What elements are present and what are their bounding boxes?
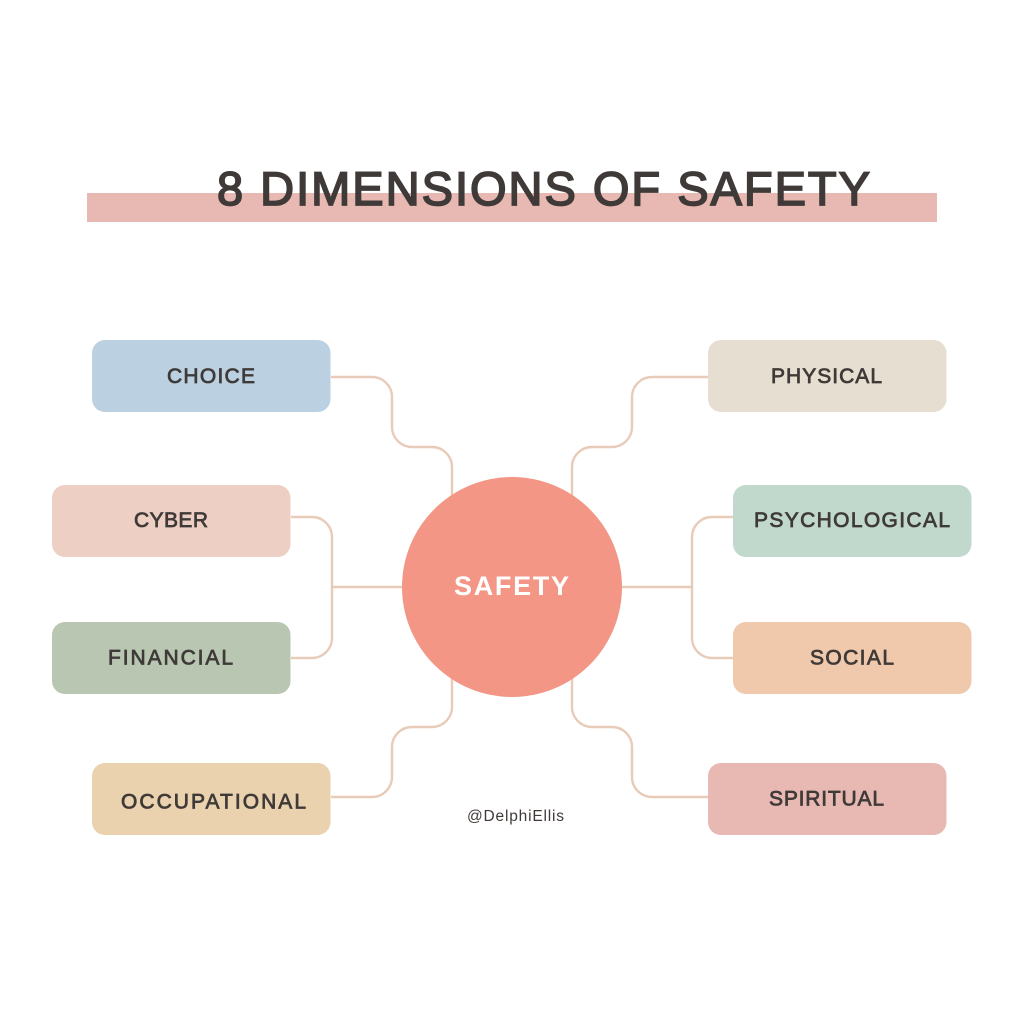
box: spiritual xyxy=(708,763,946,835)
box: choice xyxy=(92,340,330,412)
box: choice: CHOICE xyxy=(167,365,255,388)
box: occupational: OCCUPATIONAL xyxy=(121,790,306,814)
box: spiritual: SPIRITUAL xyxy=(769,788,884,810)
box: physical: PHYSICAL xyxy=(771,365,882,388)
box: psychological xyxy=(733,485,972,557)
box: financial xyxy=(52,622,290,694)
box: cyber: CYBER xyxy=(134,509,208,532)
box: social xyxy=(733,622,972,694)
central circle: safety xyxy=(402,477,622,697)
box: financial: FINANCIAL xyxy=(108,646,233,670)
title: 8 DIMENSIONS OF SAFETY xyxy=(217,162,870,215)
box: occupational xyxy=(92,763,330,835)
central circle: safety: SAFETY xyxy=(454,571,569,601)
box: physical xyxy=(708,340,946,412)
box: psychological: PSYCHOLOGICAL xyxy=(754,509,950,532)
connector lines xyxy=(291,377,733,797)
attribution handle: @DelphiEllis xyxy=(467,808,564,825)
box: cyber xyxy=(52,485,290,557)
box: social: SOCIAL xyxy=(810,646,894,670)
title banner bar xyxy=(87,193,937,222)
